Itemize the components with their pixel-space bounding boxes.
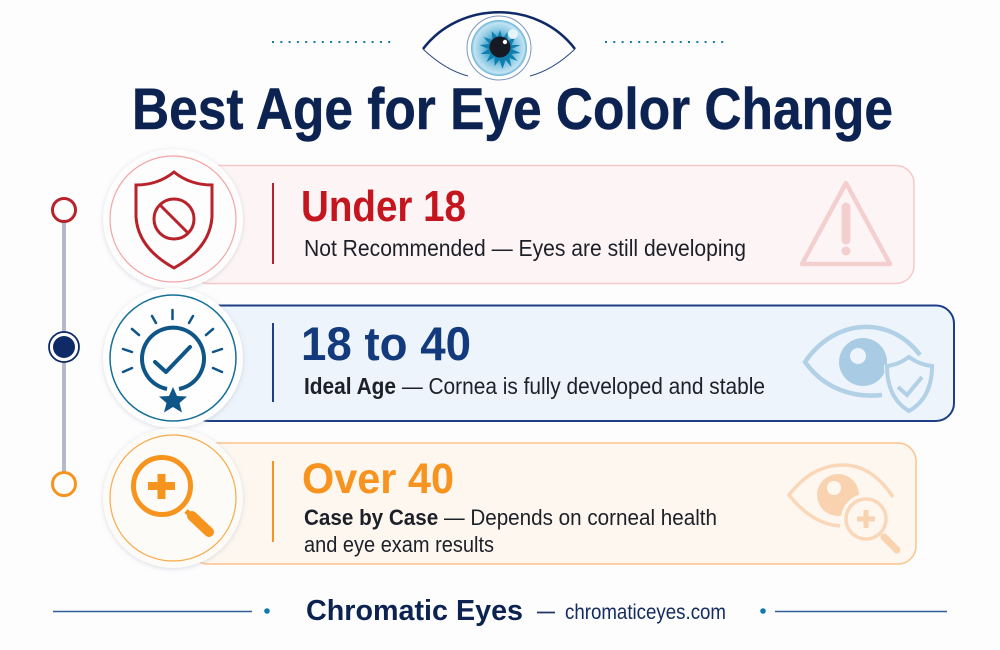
divider	[272, 461, 274, 542]
dash	[537, 612, 555, 614]
description: over 40: and eye exam results	[304, 532, 494, 557]
description: under 18: Not Recommended — Eyes are still developing	[304, 235, 746, 261]
icon: eye with shield	[805, 327, 935, 414]
timeline marker: under 18	[52, 198, 76, 222]
heading: 18 to 40: 18 to 40	[301, 317, 471, 370]
timeline	[49, 198, 79, 496]
description: over 40: Case by Case — Depends on corneal health	[304, 505, 735, 530]
timeline marker: over 40	[52, 472, 76, 496]
header dotted line right	[605, 41, 725, 43]
header dotted line left	[272, 41, 392, 43]
icon badge: magnifier with plus	[103, 428, 243, 568]
timeline marker: 18 to 40	[49, 332, 79, 362]
divider	[272, 323, 274, 402]
heading: under 18: Under 18	[301, 182, 466, 231]
footer	[53, 595, 947, 627]
website: chromaticeyes.com	[565, 601, 726, 624]
header eye icon	[423, 12, 575, 80]
panel: over 40	[190, 443, 916, 564]
title: Best Age for Eye Color Change	[132, 77, 893, 142]
icon: eye with magnifier	[789, 465, 897, 550]
panel: 18 to 40	[190, 306, 954, 421]
heading: over 40: Over 40	[302, 455, 454, 503]
divider	[272, 183, 274, 264]
icon badge: check with star	[103, 288, 243, 428]
brand name: Chromatic Eyes	[306, 595, 523, 627]
description: 18 to 40: Ideal Age — Cornea is fully developed and stable	[304, 373, 765, 399]
icon badge: shield with prohibition	[103, 149, 243, 289]
icon: warning triangle	[802, 183, 890, 264]
panel: under 18	[190, 166, 914, 284]
